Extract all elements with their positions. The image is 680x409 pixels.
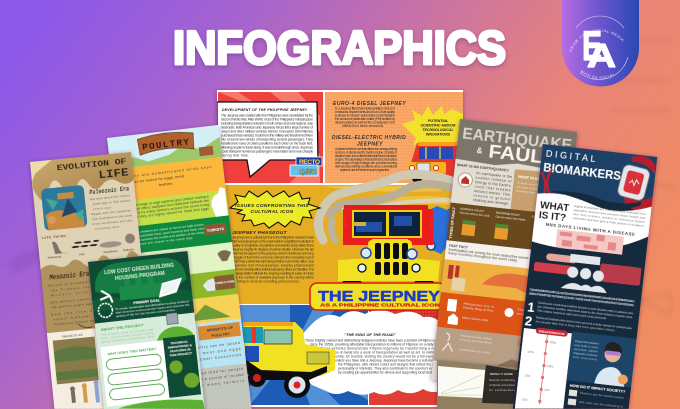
panel: earthquake header: & bbox=[476, 146, 483, 156]
panel: society impact: HOW DO IT IMPACT SOCIETY? bbox=[570, 384, 626, 394]
panel: paleozoic era: Paleozoic Era bbox=[89, 185, 130, 196]
panel: scientist: Digital biomarkers bbox=[575, 339, 600, 346]
panel: about the project: green building techniques, and bbox=[102, 334, 154, 344]
panel: timeline: 2005 bbox=[524, 374, 531, 378]
panel: biomarkers header bbox=[537, 144, 657, 213]
text: numbered points: 2 bbox=[524, 313, 533, 329]
panel: green building header: that minimize environmental impact and improve the bbox=[116, 303, 190, 315]
panel: what is an earthquake: A fault is a fracture bbox=[517, 181, 548, 188]
chart panel bbox=[438, 366, 485, 398]
panel: fast fact bbox=[445, 240, 564, 272]
banner: poultry title bbox=[137, 130, 195, 155]
poster: earthquake and fault bbox=[431, 119, 577, 392]
poster: poultry: in small households bbox=[193, 353, 242, 362]
panel: society impact: and costs can be reduced by it bbox=[579, 400, 623, 409]
logo badge: A bbox=[587, 37, 616, 74]
poster: poultry: Meat chickens are raised on farms for high protein bbox=[132, 222, 204, 235]
panel: types of fault: TYPES OF FAULT bbox=[449, 206, 456, 239]
poster: poultry: major effect; backyard and traditional methods are bbox=[131, 199, 209, 212]
poster: chart page: for earthquakes bbox=[489, 388, 516, 392]
panel: red-orange facts: Philippines lies in bbox=[464, 302, 494, 309]
starburst: potential innovations: INNOVATIONS bbox=[426, 132, 451, 136]
panel: red-orange facts: Pacific Ring of Fire bbox=[463, 306, 494, 313]
panel: torn paper header: LIFE bbox=[98, 167, 130, 182]
starburst: potential innovations bbox=[402, 106, 463, 145]
panel: what is an earthquake: WHAT IS A FAULT? bbox=[518, 175, 553, 183]
panel: euro-4 and hybrid jeepney: JEEPNEY bbox=[357, 142, 383, 148]
poster: chart page bbox=[437, 360, 522, 409]
panel: types of fault: Occurs when the rock bbox=[460, 211, 490, 218]
panel: what is an earthquake: results in ground bbox=[473, 193, 510, 201]
panel: green building header: To create sustainable and affordable housing solutions bbox=[115, 299, 190, 311]
panel: paleozoic era: Life flourished in the seas bbox=[92, 213, 132, 221]
panel: timeline: 2015 bbox=[544, 389, 550, 392]
panel: about the project: ABOUT THE PROJECT bbox=[100, 322, 144, 332]
panel: what is it: WHAT bbox=[539, 200, 570, 214]
panel: euro-4 and hybrid jeepney: effects from these emissions. bbox=[342, 124, 384, 128]
panel: euro-4 and hybrid jeepney: and usage of high-voltage are provided during bbox=[335, 161, 397, 165]
panel: types of fault: STRIKE SLIP bbox=[532, 214, 556, 221]
poster: poultry: Poultry can be raised bbox=[192, 341, 240, 350]
panel: technical innovations: FEATURES IN bbox=[170, 347, 191, 354]
panel: paleozoic era: Arthropods bbox=[47, 254, 62, 260]
logo badge bbox=[562, 0, 639, 86]
panel: what is an earthquake: or zone of fractures bbox=[517, 185, 547, 192]
starburst: potential innovations: TECHNOLOGICAL bbox=[422, 128, 454, 132]
illustration: blue decoration bbox=[431, 206, 450, 254]
text: numbered points: THE BIOMARKERS ARE COLLECTED FROM APPS AND SMARTWATCHES WITH THE PATIENTS ONLY bbox=[529, 287, 635, 303]
text: king of the road body: personality or interests. They also contribute to the country's economy bbox=[338, 366, 443, 370]
text: phaseout body: expensive cost of new jeepneys, Jeepney phaseout and bbox=[232, 264, 314, 268]
panel: timeline: BREAKTHROUGHS bbox=[539, 329, 565, 336]
panel: fast fact: Earthquakes are among the most destructive events in bbox=[448, 248, 532, 261]
text: phaseout body: resulting in several crowding phenomenon. bbox=[232, 280, 300, 284]
panel: about the project bbox=[100, 311, 195, 347]
panel: paleozoic era: Life Forms: bbox=[41, 234, 68, 241]
panel: about the project: The project aims to provide low bbox=[101, 327, 153, 337]
logo badge: E bbox=[582, 22, 602, 69]
banner: poultry title: POULTRY bbox=[142, 136, 191, 153]
panel: euro-4 and hybrid jeepney: emissions requirements and Euro 4 fuel quality bbox=[335, 110, 395, 114]
panel: development (red comic): installed two rows of chairs parallel to each other on the back bed, bbox=[221, 142, 313, 146]
title: INFOGRAPHICS bbox=[173, 21, 506, 74]
text: numbered points: are otherwise healthy; data flows back to the clinic between regular visits. bbox=[537, 304, 633, 319]
text: king of the road body bbox=[305, 338, 443, 374]
panel: red-orange facts bbox=[437, 292, 558, 340]
smoke plume bbox=[318, 174, 465, 240]
panel: earthquake header: FAULT bbox=[488, 141, 555, 169]
panel: what is an earthquake: shaking and damage. bbox=[473, 198, 509, 206]
text: king of the road body: These brightly colored and distinctively designed vehicles have been a symbol of Filipino culture, bbox=[305, 338, 443, 342]
panel: scientist bbox=[566, 331, 637, 388]
panel: euro-4 and hybrid jeepney: start and stop driving conditions, since conventional bbox=[335, 164, 397, 168]
panel: about the project: cost, eco-friendly homes using bbox=[101, 331, 154, 340]
panel: issues (yellow) bbox=[217, 174, 465, 306]
poster: poultry: feathers. bbox=[159, 182, 174, 187]
text: phaseout body: Jeepney roughly 40 degrees of carbon dioxide. However, the are bbox=[232, 248, 314, 252]
text: numbered points: This makes treatment safer and much more personal. bbox=[537, 308, 607, 320]
text: numbered points: for people who live a long way from specialist clinics. bbox=[536, 319, 616, 332]
logo badge: GROW YOUR SOCIAL MEDIA bbox=[570, 29, 624, 52]
poster: poultry: and a source of income bbox=[196, 373, 244, 382]
panel: mesozoic era: Saw the rise of many bbox=[51, 307, 112, 317]
poster: evolution of life bbox=[30, 152, 156, 409]
panel: green building header: HOUSING PROGRAM bbox=[115, 271, 165, 282]
starburst: issues confronting: ISSUES CONFRONTING THIS bbox=[235, 203, 309, 209]
text: phaseout body: will most certainly affect individual jeepney driver and families. The bbox=[232, 268, 314, 272]
panel: paleozoic era: Amphibians bbox=[103, 249, 119, 254]
panel: red-orange facts: every year here bbox=[517, 311, 545, 319]
panel: types of fault: REVERSE FAULT bbox=[496, 211, 520, 217]
panel: scientist: accurate, earlier bbox=[574, 347, 598, 354]
panel: timeline: 1950s bbox=[549, 341, 557, 345]
poster: poultry: and they are highly valued for meat and eggs. bbox=[132, 206, 210, 220]
panel: scientist: and treatment bbox=[573, 355, 597, 362]
panel: what is it: can help explain, predict or influence health bbox=[573, 212, 645, 224]
panel: what is an earthquake: WHAT IS AN EARTHQUAKE? bbox=[457, 163, 510, 173]
panel: development (red comic): into a brand new vehicle of transporting several passengers. They bbox=[221, 138, 313, 142]
panel: what is it bbox=[532, 188, 652, 258]
panel: mesozoic era: 252 million years ago to bbox=[50, 295, 105, 305]
illustration: side-view jeepney bbox=[243, 322, 335, 398]
poster: poultry: BENEFITS OF bbox=[207, 325, 234, 333]
panel: types of fault: NORMAL FAULT bbox=[460, 207, 484, 213]
panel: development (red comic): DEVELOPMENT OF THE PHILIPPINE JEEPNEY bbox=[222, 108, 308, 112]
text: phaseout body: that, the number of available jeepneys in the country will be bbox=[232, 276, 314, 280]
panel: what is it: outcomes and they give a fuller picture of a patient. bbox=[573, 216, 645, 228]
panel: torn paper header bbox=[30, 152, 135, 201]
panel: paleozoic era: Began with the Cambrian bbox=[91, 208, 132, 216]
starburst: issues confronting bbox=[230, 191, 320, 228]
panel: paleozoic era: Mollusks bbox=[123, 247, 135, 252]
panel: biomarkers header: DIGITAL bbox=[545, 148, 599, 164]
logo: recto quiapo sign bbox=[290, 157, 322, 176]
panel: mesozoic era: 66 million years ago bbox=[52, 302, 93, 309]
poster: chart page: Seismic monitoring bbox=[489, 378, 515, 382]
panel: development (red comic): destroyed. Both American and Japanese forces left a large number of bbox=[221, 126, 313, 130]
panel: development (red comic): allowing people to travel along. It was a breakthrough since Jeepneys bbox=[221, 146, 313, 150]
panel: development (red comic): Second World War. After WWII, most of the Philippines' infrastructure bbox=[221, 118, 313, 122]
panel: what is it: IS IT? bbox=[538, 210, 567, 224]
poster: poultry: Free-range or cage systems give chicken rearing a bbox=[131, 195, 209, 208]
panel: mesozoic era: Mesozoic Era bbox=[48, 271, 90, 283]
panel: what is it: Digital biomarkers are measurements collected from bbox=[574, 204, 647, 216]
panel: scientist: may lead to more bbox=[574, 343, 599, 350]
starburst: potential innovations: SCIENTIFIC AND/OR bbox=[420, 124, 456, 128]
panel: development (red comic): during that time. bbox=[221, 154, 249, 158]
panel: what is an earthquake: sudden release of bbox=[475, 176, 512, 184]
panel: technical innovations: INNOVATIONS & bbox=[168, 343, 193, 350]
panel: what is an earthquake: between two blocks bbox=[516, 189, 547, 196]
panel: what is it: NNS DAYS LIVING WITH A DISEASE bbox=[546, 222, 636, 237]
poster: poultry: for meat and eggs bbox=[193, 347, 241, 356]
panel: evolution illustration: TIMELINE OF LIFE bbox=[61, 334, 83, 339]
panel: biomarkers header: BIOMARKERS bbox=[543, 162, 622, 183]
illustration: big jeepney front bbox=[338, 205, 440, 282]
panel: what is an earthquake: crust that creates bbox=[474, 185, 511, 192]
panel: tan facts: strong earthquakes bbox=[460, 337, 492, 345]
panel: issues (yellow): JEEPNEY PHASEOUT bbox=[232, 230, 288, 236]
panel: euro-4 and hybrid jeepney: sources. A diesel electric hybrid engine consists of bbox=[335, 150, 397, 154]
panel: what is an earthquake: An earthquake is the bbox=[476, 171, 512, 179]
panel: paleozoic era: years ago bbox=[93, 205, 111, 211]
panel: fast fact: many countries throughout the world today. bbox=[448, 251, 518, 263]
panel: mesozoic era bbox=[40, 250, 148, 341]
banner: the jeepney title bbox=[310, 283, 446, 310]
panel: people speech bubbles bbox=[532, 250, 642, 297]
text: king of the road body: by creating job opportunities for drivers and supporting local businesses. bbox=[338, 370, 443, 374]
panel: tan facts bbox=[433, 326, 554, 373]
text: king of the road body: country, for tourists, visiting the country would not be a full experience bbox=[332, 354, 443, 358]
panel: paleozoic era: Era from about 541 million bbox=[90, 193, 130, 201]
panel: green building header: PRIMARY GOAL bbox=[133, 298, 161, 305]
panel: technical innovations bbox=[163, 335, 201, 398]
panel: red-orange facts: Thousands felt bbox=[517, 307, 546, 315]
panel: timeline: 1990s bbox=[547, 365, 555, 369]
panel: green building header: quality of life for low income communities. bbox=[116, 308, 176, 318]
icon: small jeepney bbox=[408, 142, 458, 182]
text: king of the road body: unless you have ride a Jeepney. Jeepneys have become a cultural icon in bbox=[335, 358, 443, 362]
poster: chart page: BRING IT HOME bbox=[490, 372, 513, 376]
poster: low cost green building bbox=[88, 251, 205, 409]
text: phaseout body: that newer jeepneys on the road result in a significant reduction in bbox=[232, 240, 314, 244]
panel: euro-4 and hybrid jeepney: the amount of particulate matter (PM) emitted by bbox=[335, 117, 395, 121]
text: king of the road body: the Philippines, with vibrant colors and designs that reflect the driver's bbox=[338, 362, 443, 366]
panel: society impact: Patients can be treated sooner bbox=[580, 391, 624, 400]
poster: poultry bbox=[107, 125, 252, 409]
panel: mesozoic era: Period of dinosaurs from bbox=[48, 278, 104, 288]
panel: technical innovations: THIS PROJECT bbox=[169, 351, 192, 358]
panel: mesozoic era: small mammal animals bbox=[53, 311, 114, 321]
panel: types of fault bbox=[447, 202, 568, 253]
panel: mesozoic era: flowering plants and birds bbox=[54, 317, 110, 326]
panel: euro-4 and hybrid jeepney: electric motor, and a diesel fueled internal combustion bbox=[335, 154, 397, 158]
panel: development (red comic): could transport numerous passengers more faster and more cheaply bbox=[221, 150, 313, 154]
panel: development (red comic): including transportation networks in both urban and rural regions, was bbox=[221, 122, 313, 126]
poster: digital biomarkers bbox=[513, 144, 657, 409]
poster: poultry: Turkeys are raised in the same way. bbox=[133, 236, 194, 247]
logo badge: WITH EA SOCIAL bbox=[580, 70, 615, 79]
poster: poultry: that improves the health and welfare of the birds. bbox=[133, 230, 205, 243]
panel: mesozoic era: Middle Life bbox=[51, 290, 88, 298]
text: king of the road body: piece of metal into a work of transportation as well as art. In visiting the bbox=[330, 350, 443, 354]
panel: paleozoic era: colonized land bbox=[95, 225, 119, 231]
panel: why does this matter: WHY DOES THIS MATTER? bbox=[107, 347, 157, 356]
poster: poultry: GUINEA FOWL bbox=[214, 279, 236, 285]
text: phaseout body bbox=[232, 236, 314, 284]
panel: types of fault: Occurs when the block bbox=[495, 214, 526, 222]
panel: fast fact orange map bbox=[441, 259, 562, 305]
poster: poultry: POULTRY bbox=[211, 331, 231, 338]
panel: red-orange facts: Many faults exist bbox=[462, 315, 488, 322]
panel: euro-4 and hybrid jeepney: A hybrid vehicle is one that utilizes two energy-storing bbox=[335, 147, 397, 151]
logo: recto quiapo sign: RECTO bbox=[299, 159, 320, 166]
panel: tan facts: Landslides are also bbox=[459, 347, 491, 355]
panel: why does this matter bbox=[100, 340, 170, 407]
panel: earthquake header bbox=[455, 119, 577, 174]
panel: evolution illustration bbox=[47, 323, 156, 409]
poster: poultry: used by many farmers around the world today bbox=[132, 202, 210, 216]
panel: euro-4 and hybrid jeepney bbox=[325, 92, 463, 183]
text: numbered points bbox=[524, 287, 635, 340]
panel: timeline: 1970s bbox=[527, 351, 535, 354]
panel: euro-4 and hybrid jeepney: DIESEL-ELECTRIC HYBRID bbox=[332, 135, 406, 141]
banner: the jeepney title: THE JEEPNEY bbox=[318, 288, 440, 305]
panel: euro-4 and hybrid jeepney: Is a Jeepney fitted that implementation of Euro 4 bbox=[335, 106, 395, 110]
text: phaseout body: detrimental aspect to the jeepney driver's livelihood and long bbox=[232, 252, 314, 256]
text: phaseout body: quality of congestion, air pollution and another study states that a bbox=[232, 244, 314, 248]
panel: paleozoic era bbox=[37, 180, 136, 260]
panel: development (red comic): purchased these vehicles. It sold from the military and transformed them bbox=[221, 134, 313, 138]
panel: what is it: wearable devices and sensors about health that bbox=[574, 208, 646, 220]
text: numbered points: Reduced hospital visits lead to less cost and a wider spread of medical care bbox=[536, 315, 632, 330]
poster: poultry: Poultry are domesticated birds kept bbox=[121, 165, 212, 180]
poster: poultry: TURKEYS bbox=[207, 227, 225, 233]
panel: mesozoic era: the Triassic through bbox=[51, 284, 101, 293]
text: king of the road body: since the 1950s, providing affordable transportation to millions of Filipinos on a daily basis. bbox=[310, 342, 443, 346]
text: king of the road body: These vehicles demonstrate Filipino ingenuity by transforming a normal bbox=[320, 346, 443, 350]
panel: king of the road bbox=[239, 305, 439, 405]
panel: what is an earthquake: energy in the Earth's bbox=[475, 180, 511, 188]
panel: paleozoic era: First vertebrate animals bbox=[92, 218, 133, 226]
panel: tan facts: Tsunamis may follow bbox=[460, 333, 493, 341]
grass bbox=[118, 395, 205, 409]
panel: society impact bbox=[568, 384, 626, 409]
poster: poultry: for many farmers bbox=[196, 379, 245, 388]
panel: timeline bbox=[515, 326, 572, 409]
text: numbered points: BEING PROMPTED TO PRODUCE DATA. THESE HAVE TWO MAIN BENEFITS FOR PATIENTS: bbox=[529, 291, 635, 307]
panel: euro-4 and hybrid jeepney: diesel engines as well as the consequent CO2 bbox=[335, 120, 395, 124]
panel: scientist: diagnosis of illness bbox=[573, 351, 598, 358]
panel: development (red comic): Jeeps and other military vehicles behind. Innovators with Filipinos bbox=[221, 130, 313, 134]
ghost background shapes bbox=[5, 40, 678, 314]
poster: poultry: Good food for people bbox=[195, 367, 243, 376]
panel: earthquake header: EARTHQUAKE bbox=[461, 125, 573, 154]
text: phaseout body: of transportation will lead the Jeepney resulting in a lack of routes bbox=[232, 272, 314, 276]
panel: green building header bbox=[88, 251, 194, 324]
panel: euro-4 and hybrid jeepney: is aimed to modern automotive modernization bbox=[335, 114, 395, 118]
poster: poultry: with specialist feed, good housing and daily care bbox=[132, 226, 205, 239]
panel: what is an earthquake: seismic waves. This bbox=[474, 189, 510, 197]
panel: green building header: LOW COST GREEN BUILDING bbox=[104, 263, 175, 276]
starburst: potential innovations: POTENTIAL bbox=[428, 119, 448, 123]
poster: the jeepney bbox=[217, 90, 465, 407]
panel: euro-4 and hybrid jeepney: engine. The advantage of reduced fuel consumption bbox=[335, 158, 397, 162]
panel: development (red comic): The Jeepney was created after the Philippines were devastated by the bbox=[221, 114, 313, 118]
panel: what is an earthquake bbox=[453, 161, 573, 215]
poster: chart page: of faults and plans bbox=[489, 383, 516, 387]
panel: fast fact: FAST FACT bbox=[449, 244, 469, 250]
panel: euro-4 and hybrid jeepney: EURO-4 DIESEL JEEPNEY bbox=[333, 101, 406, 107]
text: numbered points: 1 bbox=[527, 299, 536, 315]
panel: paleozoic era: years ago to 252 million bbox=[92, 198, 131, 206]
panel: paleozoic era: Fish bbox=[79, 252, 85, 257]
logo: recto quiapo sign: QUIAPO bbox=[299, 169, 318, 176]
panel: technical innovations: TECHNICAL bbox=[170, 339, 189, 345]
panel: king of the road: "THE KING OF THE ROAD" bbox=[344, 332, 396, 337]
text: phaseout body: which has a direct link with transport fares such in the ration. Due bbox=[232, 260, 314, 264]
text: phaseout body: struggle of fuel in the economy owing to the increasing cost of bbox=[232, 256, 314, 260]
banner: the jeepney title: AS A PHILIPPINE CULTURAL ICON bbox=[320, 302, 441, 308]
text: phaseout body: Jeepneys are a cultural symbol in the Philippines' research have bbox=[232, 236, 314, 240]
panel: euro-4 and hybrid jeepney: systems use the least amount of gasoline. bbox=[340, 168, 390, 172]
starburst: issues confronting: CULTURAL ICON bbox=[251, 209, 294, 215]
panel: timeline: 2020 bbox=[522, 398, 528, 402]
panel: development (red comic) bbox=[217, 92, 323, 183]
text: numbered points: Continuous monitoring enables doctors to spot disease early in patients who bbox=[538, 300, 634, 315]
panel: torn paper header: EVOLUTION OF bbox=[56, 158, 127, 173]
poster: poultry: that can be reared for eggs, meat bbox=[124, 174, 185, 185]
